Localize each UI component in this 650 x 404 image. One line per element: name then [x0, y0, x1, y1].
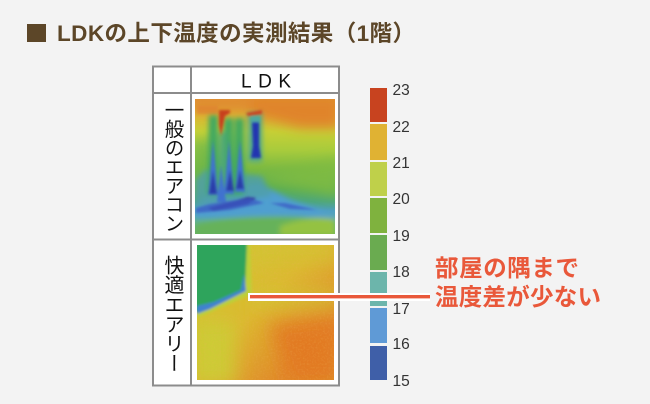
scale labels: 20 [392, 191, 410, 208]
scale labels: 16 [392, 336, 410, 353]
thermal image: standard air conditioner [195, 99, 335, 234]
scale labels: 17 [392, 301, 410, 318]
scale labels: 15 [392, 373, 410, 390]
scale labels [392, 82, 410, 390]
scale labels: 21 [392, 155, 410, 172]
thermal image: comfort area [197, 245, 334, 380]
temperature color scale [370, 88, 387, 380]
heading: LDKの上下温度の実測結果（1階） [57, 21, 415, 46]
scale labels: 18 [392, 264, 410, 281]
row label: standard air conditioner: 一般のエアコン [161, 100, 184, 232]
callout leader line [248, 293, 430, 301]
row label: comfort area: 快適エアリー [161, 255, 184, 373]
scale labels: 19 [392, 228, 410, 245]
table frame [153, 66, 339, 386]
scale labels: 22 [392, 119, 410, 136]
scale labels: 23 [392, 82, 410, 99]
callout text [435, 255, 601, 310]
column header: LDK: LDK [241, 72, 291, 92]
callout text: 部屋の隅まで [435, 255, 579, 281]
callout text: 温度差が少ない [435, 283, 601, 310]
